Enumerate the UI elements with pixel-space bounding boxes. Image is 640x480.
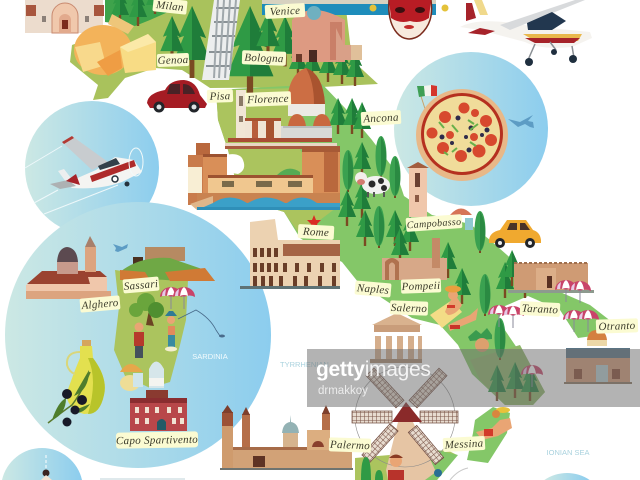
label: Alghero: Alghero <box>80 297 119 312</box>
icon: carnival mask <box>389 0 432 39</box>
icon: Palermo cathedral <box>220 405 353 470</box>
panel: Sardinia circle <box>5 202 271 468</box>
icon: red car <box>147 80 207 112</box>
label: Capo Spartivento: Capo Spartivento <box>116 434 198 447</box>
label: Ancona: Ancona <box>362 112 399 125</box>
label: Salerno: Salerno <box>391 302 428 315</box>
label: Campobasso: Campobasso <box>406 217 462 231</box>
icon: Leaning Tower of Pisa <box>202 0 240 80</box>
label: Genoa: Genoa <box>157 54 189 67</box>
label: Pompeii: Pompeii <box>400 280 441 293</box>
icon: cow <box>355 172 390 197</box>
icon: umbrellas and fisherman <box>160 287 225 352</box>
icon: beach umbrellas <box>488 280 599 387</box>
icon: Taranto castle <box>508 263 594 293</box>
label: Palermo: Palermo <box>329 439 370 452</box>
icon: Calabria sunbather <box>476 407 512 440</box>
label: Naples: Naples <box>355 282 390 297</box>
icon: beach umbrella Campobasso <box>450 208 473 230</box>
label: Bologna: Bologna <box>244 52 284 65</box>
label: Sassari: Sassari <box>123 278 159 293</box>
watermark text: drmakkoy: drmakkoy <box>318 385 368 397</box>
icon: Colosseum <box>240 219 340 289</box>
label: Rome: Rome <box>302 226 329 239</box>
icon: walking man <box>134 322 144 358</box>
icon: red fort Capo Spartivento <box>130 390 187 431</box>
icon: olive oil bottle <box>48 340 105 426</box>
label: Florence: Florence <box>246 93 289 106</box>
icon: Pompeii ruins <box>382 238 447 280</box>
label: Venice <box>265 3 305 19</box>
icon: Campobasso tower <box>407 162 429 217</box>
icon: plane in circle <box>25 136 143 214</box>
text: IONIAN SEA: IONIAN SEA <box>547 448 589 457</box>
icon: forest trees <box>111 0 539 401</box>
icon: oak tree <box>129 293 164 326</box>
icon: Greek temple <box>370 313 422 363</box>
text: Tyrrhenian sea: TYRRHENIAN <box>280 360 329 369</box>
label: Rome <box>298 224 334 240</box>
label: Venice: Venice <box>269 5 301 18</box>
label: Otranto: Otranto <box>598 320 636 333</box>
icon: cheese <box>74 14 156 76</box>
icon: Ponte Vecchio bridge <box>188 143 340 210</box>
icon: small plane Sardinia <box>113 244 128 252</box>
panel: bottom-left circle <box>2 448 82 480</box>
icon: sunbathers <box>430 286 478 331</box>
icon: Bologna buildings <box>292 6 362 62</box>
icon: Alghero church <box>26 236 111 299</box>
watermark text: gettyimages: gettyimages <box>316 358 431 381</box>
icon: figure in bottom-left circle <box>41 455 52 480</box>
panel: bottom-right circle <box>544 473 590 480</box>
icon: windmill <box>352 367 468 480</box>
label: Taranto: Taranto <box>521 303 559 316</box>
text: SARDINIA: SARDINIA <box>192 352 228 361</box>
icon: lighthouse and beach hut <box>120 362 164 391</box>
watermark band <box>307 349 640 407</box>
icon: Florence cathedral and skyline <box>225 68 340 149</box>
icon: Venice canal strip <box>262 0 448 15</box>
panel: plane circle <box>25 101 159 235</box>
icon: Rome star <box>307 215 321 229</box>
icon: figure with green hat <box>468 328 492 352</box>
icon: small plane top right <box>460 0 592 66</box>
panel: pizza circle <box>394 52 548 206</box>
icon: distant plane silhouette <box>508 115 534 128</box>
icon: Italian flag <box>417 85 437 115</box>
label: Messina: Messina <box>443 437 484 452</box>
icon: Otranto palace <box>564 330 632 384</box>
label: Pisa: Pisa <box>208 90 231 103</box>
icon: pizza <box>416 89 508 181</box>
icon: church top left <box>25 0 104 33</box>
icon: yellow car <box>489 220 541 248</box>
icon: Sassari town <box>120 247 215 281</box>
map: Sardinia island <box>114 270 188 388</box>
